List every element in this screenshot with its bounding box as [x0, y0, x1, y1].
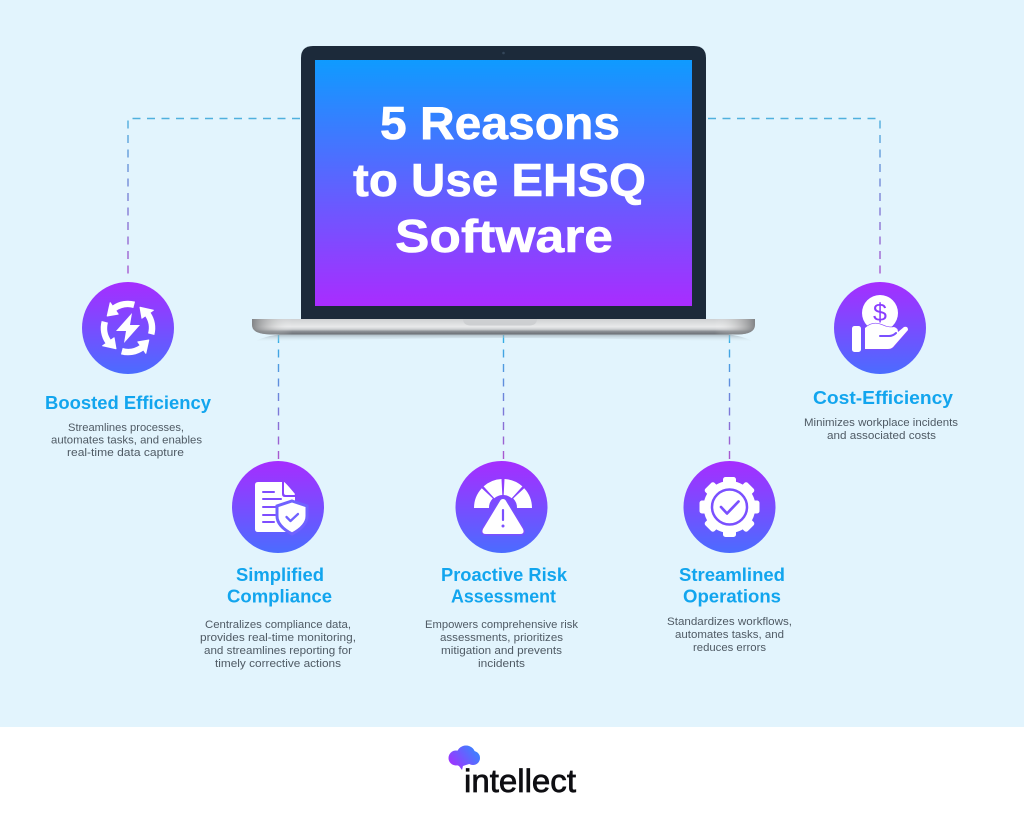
- item: boosted efficiency: [45, 282, 211, 459]
- heading: [441, 565, 568, 606]
- description: Standardizes workflows,: [667, 616, 792, 628]
- item: proactive risk assessment: [425, 461, 579, 670]
- footer band: [0, 727, 1024, 839]
- description: Centralizes compliance data,: [205, 619, 351, 631]
- icon: gear with check: [684, 461, 776, 553]
- heading: Boosted Efficiency: [45, 393, 211, 413]
- description: [804, 417, 959, 442]
- laptop: [252, 46, 755, 342]
- description: real-time data capture: [67, 447, 184, 459]
- heading: Operations: [683, 586, 781, 606]
- description: Minimizes workplace incidents: [804, 417, 959, 429]
- heading: [679, 565, 785, 606]
- camera: [502, 52, 505, 54]
- heading: [227, 565, 332, 606]
- title: [353, 97, 646, 262]
- title: 5 Reasons: [380, 97, 620, 149]
- icon: gauge with warning triangle: [456, 461, 548, 553]
- title: to Use EHSQ: [353, 154, 646, 206]
- description: and streamlines reporting for: [204, 645, 352, 657]
- heading: Assessment: [451, 586, 556, 606]
- title: Software: [395, 210, 613, 262]
- connector: cost-efficiency: [708, 118, 880, 280]
- item: streamlined operations: [667, 461, 792, 654]
- connector: boosted efficiency: [128, 118, 300, 280]
- description: incidents: [478, 658, 526, 670]
- laptop shadow: [254, 334, 754, 342]
- logo cloud icon: [448, 746, 480, 770]
- laptop notch: [463, 319, 537, 326]
- heading: Compliance: [227, 586, 332, 606]
- icon: document with shield: [232, 461, 324, 553]
- heading: Simplified: [236, 565, 324, 585]
- description: automates tasks, and enables: [51, 434, 203, 446]
- icon: hand holding dollar coin: $: [873, 299, 887, 327]
- description: Streamlines processes,: [68, 422, 184, 434]
- description: [667, 616, 792, 654]
- connector: streamlined operations: [728, 335, 730, 460]
- description: Empowers comprehensive risk: [425, 619, 579, 631]
- icon: cycle arrows with lightning bolt: [82, 282, 174, 374]
- heading: Cost-Efficiency: [813, 388, 953, 408]
- connector: simplified compliance: [278, 335, 280, 460]
- logo: intellect: [448, 746, 576, 799]
- item: simplified compliance: [200, 461, 356, 670]
- description: [425, 619, 579, 670]
- laptop base: [252, 319, 755, 334]
- heading: Streamlined: [679, 565, 785, 585]
- item: cost-efficiency: [804, 282, 959, 442]
- description: reduces errors: [693, 642, 767, 654]
- connector: proactive risk assessment: [502, 335, 504, 460]
- description: mitigation and prevents: [441, 645, 563, 657]
- logo wordmark: intellect: [464, 763, 576, 799]
- icon: hand holding dollar coin: [834, 282, 926, 374]
- description: [51, 422, 203, 459]
- base edge shading: [252, 319, 755, 334]
- description: automates tasks, and: [675, 629, 784, 641]
- description: assessments, prioritizes: [440, 632, 564, 644]
- description: and associated costs: [827, 430, 937, 442]
- description: [200, 619, 356, 670]
- icon: lightning bolt: [116, 313, 140, 343]
- laptop screen: [315, 60, 692, 306]
- heading: Proactive Risk: [441, 565, 568, 585]
- laptop lid: [301, 46, 706, 319]
- description: timely corrective actions: [215, 658, 342, 670]
- description: provides real-time monitoring,: [200, 632, 356, 644]
